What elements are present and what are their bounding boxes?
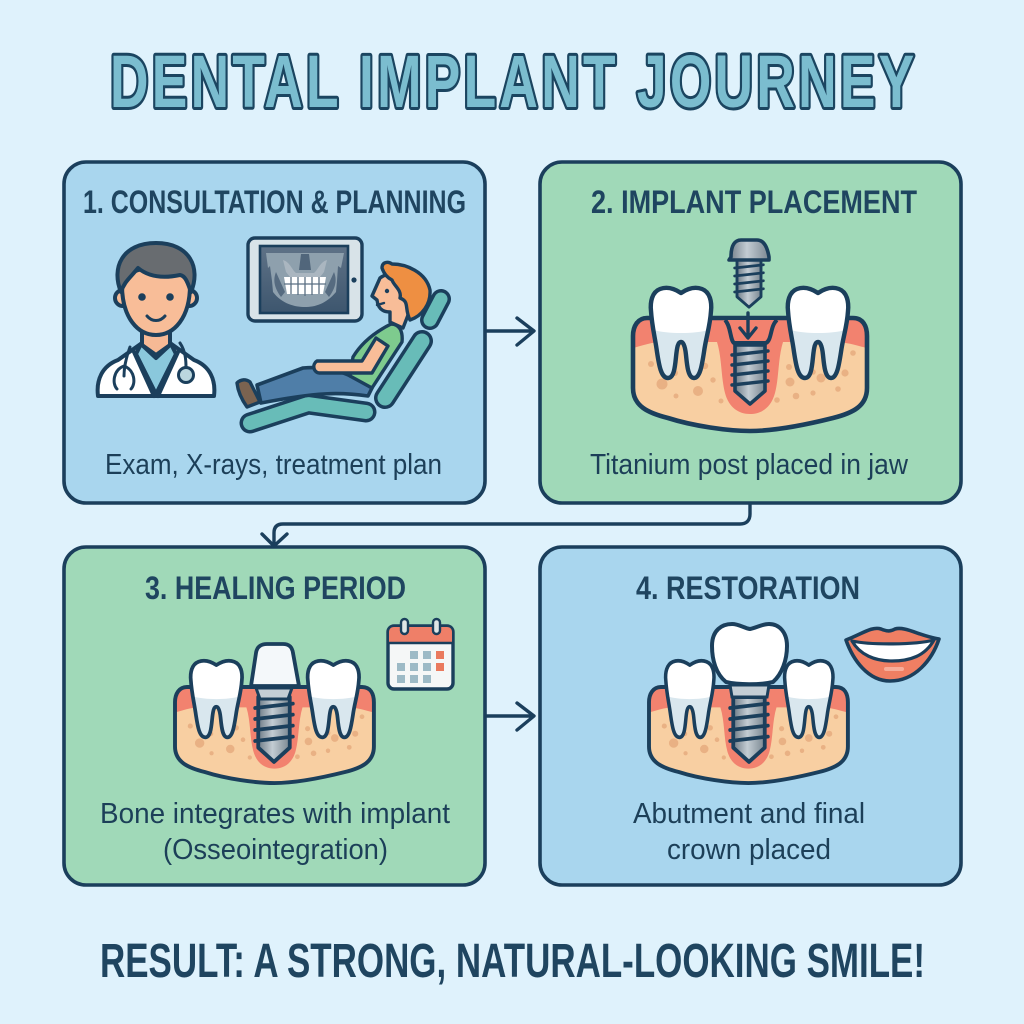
- panel: implant placement: [540, 162, 961, 503]
- icon: final crown on implant: [649, 624, 848, 783]
- title: DENTAL IMPLANT JOURNEY: [110, 40, 914, 123]
- arrow: step 3 to 4: [487, 703, 534, 730]
- caption: step 4 second line: crown placed: [667, 834, 831, 866]
- heading: step 1: 1. CONSULTATION & PLANNING: [83, 184, 466, 220]
- arrow: step 1 to 2: [487, 318, 534, 345]
- caption: step 2: Titanium post placed in jaw: [590, 449, 909, 481]
- caption: step 3: Bone integrates with implant: [100, 798, 450, 830]
- caption: step 4: Abutment and final: [633, 798, 865, 830]
- icon: smiling lips: [846, 628, 939, 681]
- heading: step 3: 3. HEALING PERIOD: [145, 570, 406, 606]
- icon: x-ray tablet: [248, 238, 362, 321]
- heading: step 4: 4. RESTORATION: [636, 570, 860, 606]
- icon: calendar: [388, 619, 453, 689]
- icon: healing implant with temporary crown: [175, 644, 374, 783]
- arrow: step 2 to 3: [262, 504, 750, 546]
- panel: consultation and planning: [64, 162, 485, 503]
- panel: restoration: [540, 547, 961, 885]
- icon: implant being placed between teeth: [633, 240, 867, 431]
- panel: healing period: [64, 547, 485, 885]
- caption: step 1: Exam, X-rays, treatment plan: [105, 449, 442, 481]
- heading: step 2: 2. IMPLANT PLACEMENT: [591, 184, 917, 220]
- caption: step 3 second line: (Osseointegration): [163, 834, 388, 866]
- icon: doctor: [98, 243, 214, 396]
- icon: patient in dental chair: [237, 262, 441, 423]
